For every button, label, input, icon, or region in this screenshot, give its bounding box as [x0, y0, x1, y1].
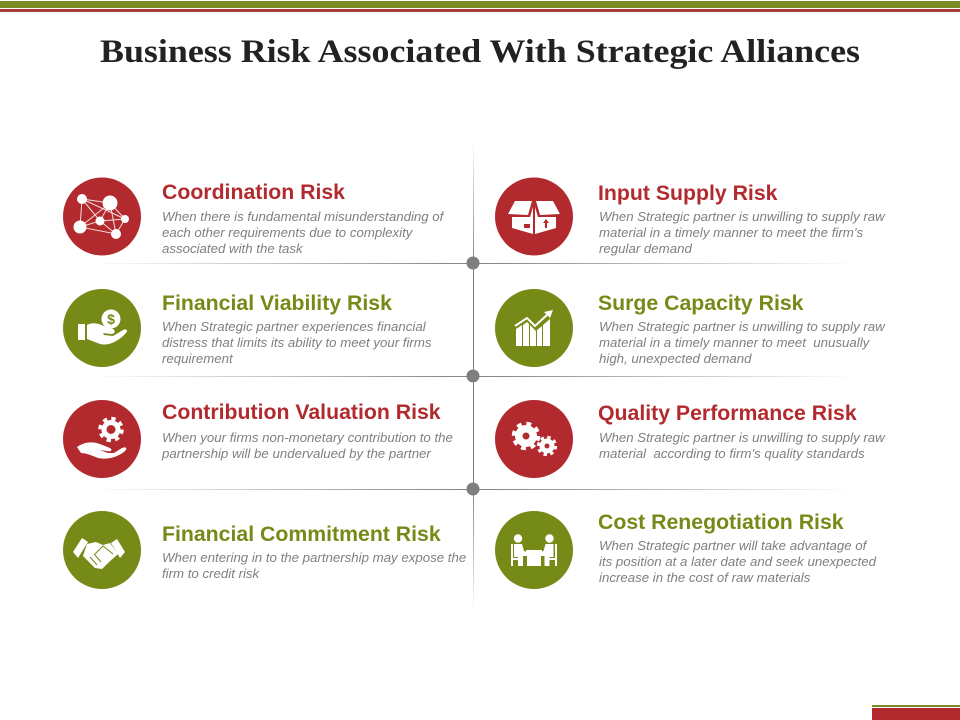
- description: When Strategic partner is unwilling to supply raw: [599, 319, 886, 334]
- icon: hand with coin: [63, 289, 141, 367]
- description: When Strategic partner experiences financial: [162, 319, 427, 334]
- description: material in a timely manner to meet unusually: [599, 335, 871, 350]
- heading: Input Supply Risk: [598, 181, 778, 205]
- panel: input supply risk: [495, 178, 886, 256]
- icon: network: [63, 178, 141, 256]
- heading: Financial Commitment Risk: [162, 522, 441, 546]
- description: When Strategic partner is unwilling to supply raw: [599, 209, 886, 224]
- panel: quality performance risk: [495, 400, 886, 478]
- panel: financial viability risk: [63, 289, 432, 367]
- description: increase in the cost of raw materials: [599, 570, 811, 585]
- panel: cost renegotiation risk: [495, 510, 877, 589]
- description: distress that limits its ability to meet your firms: [162, 335, 432, 350]
- panel: coordination risk: [63, 178, 445, 256]
- description: partnership will be undervalued by the partner: [161, 446, 431, 461]
- description: material according to firm’s quality standards: [599, 446, 865, 461]
- description: When there is fundamental misunderstanding of: [162, 209, 445, 224]
- icon: hand with gear: [63, 400, 141, 478]
- description: regular demand: [599, 241, 692, 256]
- heading: Coordination Risk: [162, 180, 345, 204]
- top banner: [0, 1, 960, 12]
- heading: Financial Viability Risk: [162, 291, 392, 315]
- icon: meeting at table: [495, 511, 573, 589]
- description: When Strategic partner will take advantage of: [599, 538, 868, 553]
- description: requirement: [162, 351, 234, 366]
- panel: surge capacity risk: [495, 289, 886, 367]
- panel: contribution valuation risk: [63, 400, 453, 478]
- description: high, unexpected demand: [599, 351, 752, 366]
- icon: open box: [495, 178, 573, 256]
- footer accent: [872, 705, 960, 720]
- heading: Cost Renegotiation Risk: [598, 510, 844, 534]
- description: its position at a later date and seek unexpected: [599, 554, 877, 569]
- description: firm to credit risk: [162, 566, 261, 581]
- description: When entering in to the partnership may expose the: [162, 550, 466, 565]
- heading: Quality Performance Risk: [598, 401, 857, 425]
- description: material in a timely manner to meet the firm’s: [599, 225, 863, 240]
- icon: handshake: [63, 511, 141, 589]
- icon: hand with coin: $: [107, 311, 115, 327]
- description: When your firms non-monetary contribution to the: [162, 430, 453, 445]
- heading: Contribution Valuation Risk: [162, 400, 441, 424]
- description: each other requirements due to complexity: [162, 225, 414, 240]
- panel: financial commitment risk: [63, 511, 466, 589]
- description: associated with the task: [162, 241, 304, 256]
- title: Business Risk Associated With Strategic Alliances: [100, 34, 860, 70]
- icon: two gears: [495, 400, 573, 478]
- timeline divider grid: [90, 145, 856, 607]
- heading: Surge Capacity Risk: [598, 291, 804, 315]
- description: When Strategic partner is unwilling to supply raw: [599, 430, 886, 445]
- icon: growth bar chart: [495, 289, 573, 367]
